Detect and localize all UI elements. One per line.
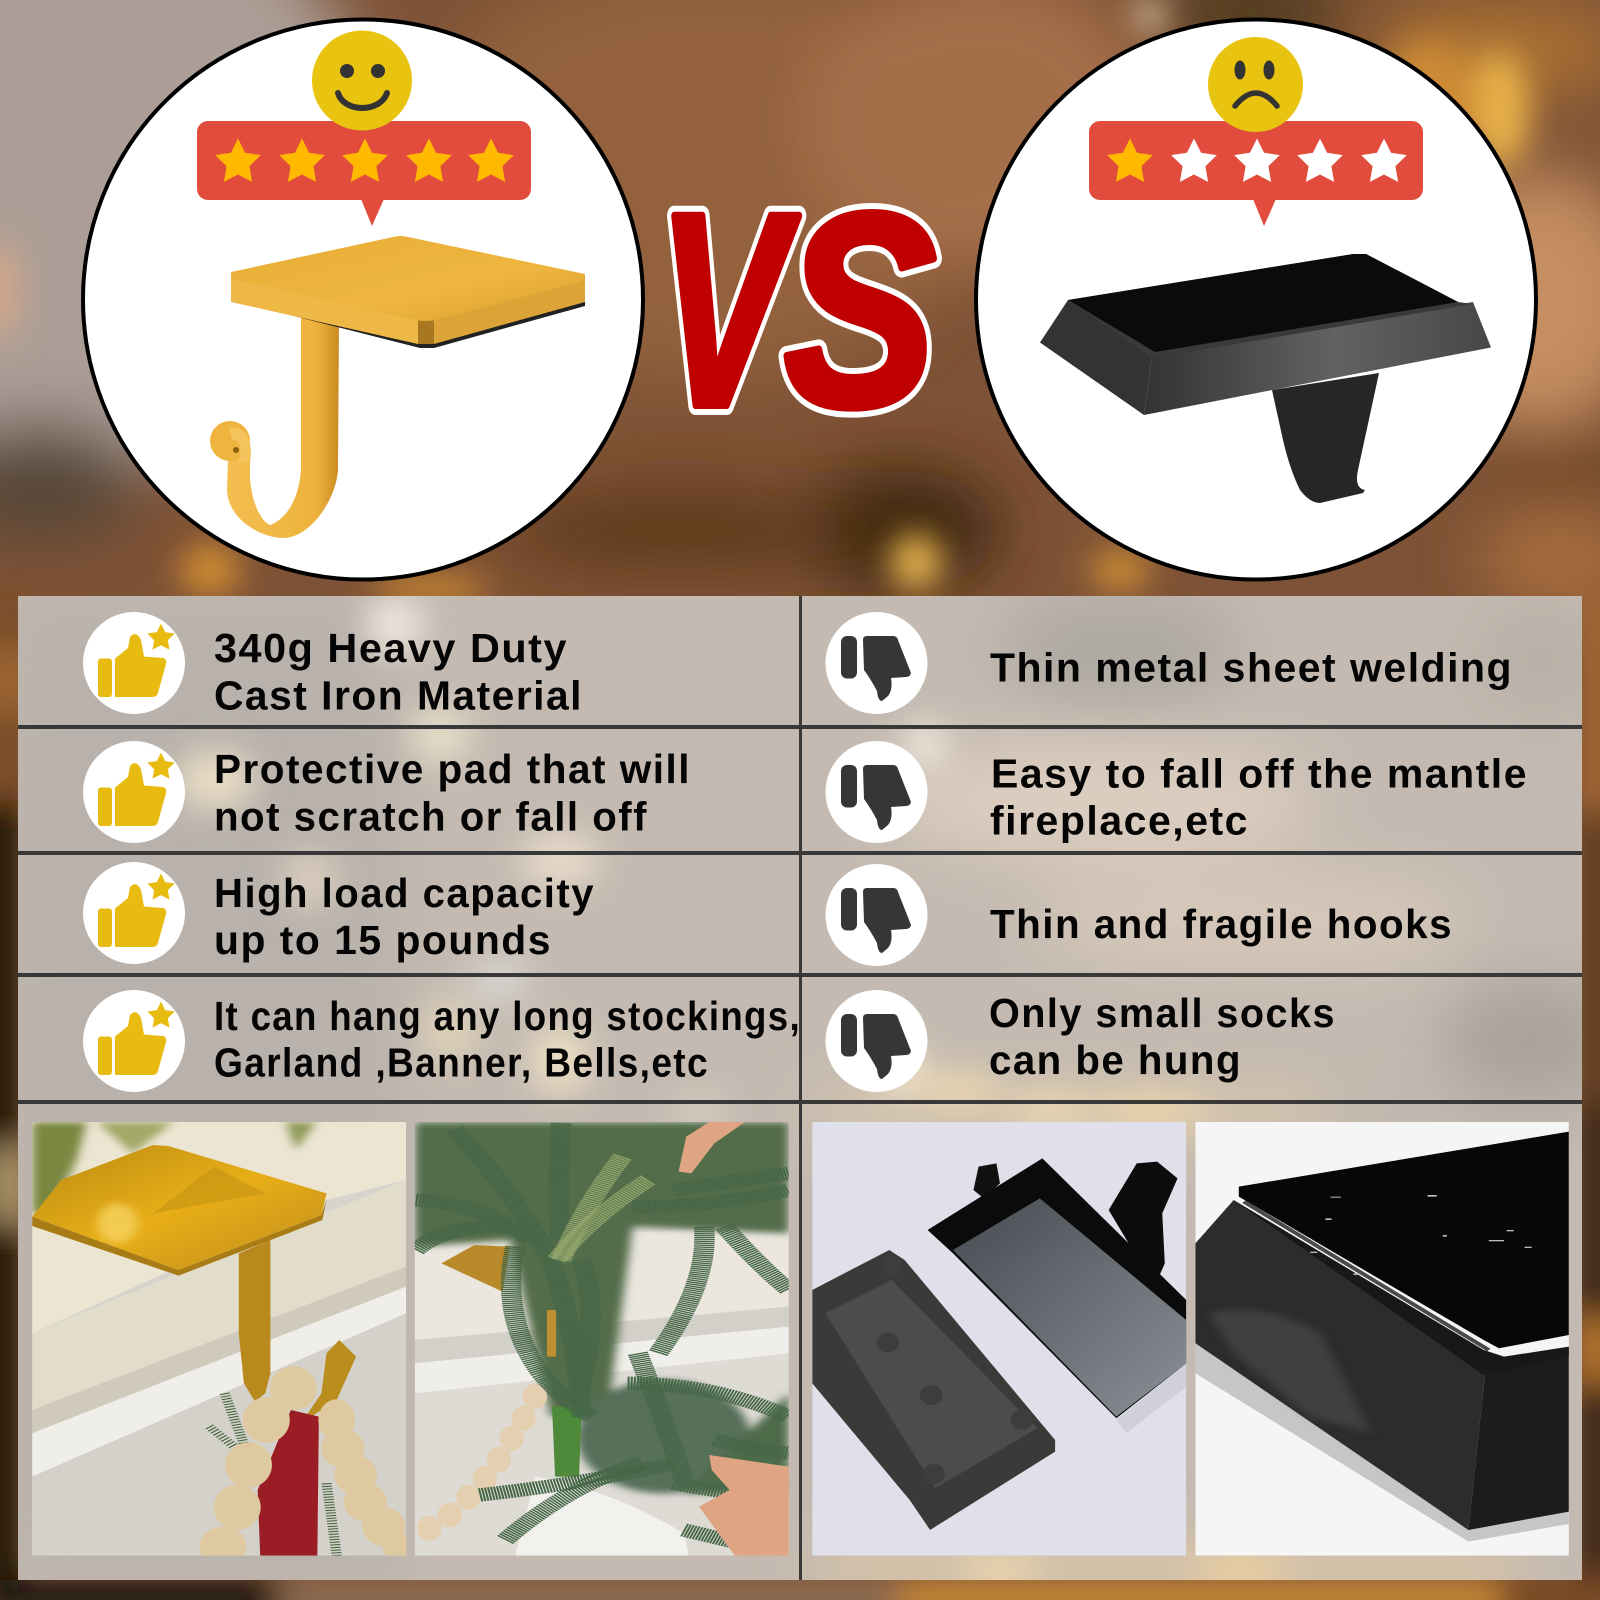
row 2 left: text: not scratch or fall off: [214, 794, 648, 840]
VS heading: S: [784, 157, 937, 464]
row 3 left: text: up to 15 pounds: [214, 917, 552, 963]
icon: sad face: [1208, 37, 1303, 132]
comparison circle: bad product: [976, 20, 1536, 580]
photo: gold hook on mantle with beads: [32, 1122, 413, 1567]
photo: disassembled black tray and pad: [812, 1122, 1186, 1556]
row 4 right: thumbs down icon: [826, 990, 928, 1092]
row 4 left: text: Garland ,Banner, Bells,etc: [214, 1040, 709, 1086]
row 2 right: text: fireplace,etc: [990, 798, 1249, 844]
row 3 right: thumbs down icon: [826, 864, 928, 966]
row 1 left: thumbs up icon: [83, 612, 185, 714]
row 2 left: text: Protective pad that will: [214, 746, 691, 792]
comparison circle: good product: [83, 20, 643, 580]
gold stocking holder product: [210, 236, 585, 538]
row 4 left: thumbs up icon: [83, 990, 185, 1092]
VS heading: [658, 157, 937, 464]
row 4 left: text: [214, 993, 801, 1086]
row and column dividers: [18, 596, 1582, 1580]
row 4 right: text: [989, 990, 1336, 1083]
row 3 left: text: [214, 870, 595, 963]
panel background: [0, 590, 1600, 1590]
row 2 right: text: [990, 750, 1528, 844]
circle background: [83, 20, 643, 580]
row 1 left: text: [214, 625, 583, 718]
row 1 left: text: 340g Heavy Duty: [214, 625, 568, 671]
row 2 right: text: Easy to fall off the mantle: [991, 750, 1528, 796]
VS heading: S: [784, 157, 937, 464]
row 4 right: text: can be hung: [989, 1037, 1242, 1083]
VS heading: V: [658, 157, 802, 464]
row 1 left: text: Cast Iron Material: [214, 672, 583, 718]
black stocking holder product: [1040, 254, 1491, 503]
row 1 right: text: Thin metal sheet welding: [990, 644, 1513, 690]
row 4 right: text: Only small socks: [989, 990, 1336, 1036]
icon: smiling face: [312, 30, 412, 130]
photo: close-up of scratched black tray corner: [1195, 1122, 1569, 1556]
rating bubble: five gold stars: [197, 121, 531, 226]
row 2 right: thumbs down icon: [826, 741, 928, 843]
row 2 left: text: [214, 746, 691, 840]
VS heading: V: [658, 157, 802, 464]
row 3 left: thumbs up icon: [83, 862, 185, 964]
photo: garland on mantle with hands: [415, 1122, 789, 1556]
row 3 left: text: High load capacity: [214, 870, 595, 916]
row 4 left: text: It can hang any long stockings,: [214, 993, 801, 1039]
circle background: [976, 20, 1536, 580]
panel: comparison table: [0, 590, 1600, 1590]
rating bubble: one gold star, four white: [1089, 121, 1423, 226]
row 3 right: text: Thin and fragile hooks: [990, 901, 1453, 947]
row 2 left: thumbs up icon: [83, 741, 185, 843]
row 1 right: thumbs down icon: [826, 612, 928, 714]
